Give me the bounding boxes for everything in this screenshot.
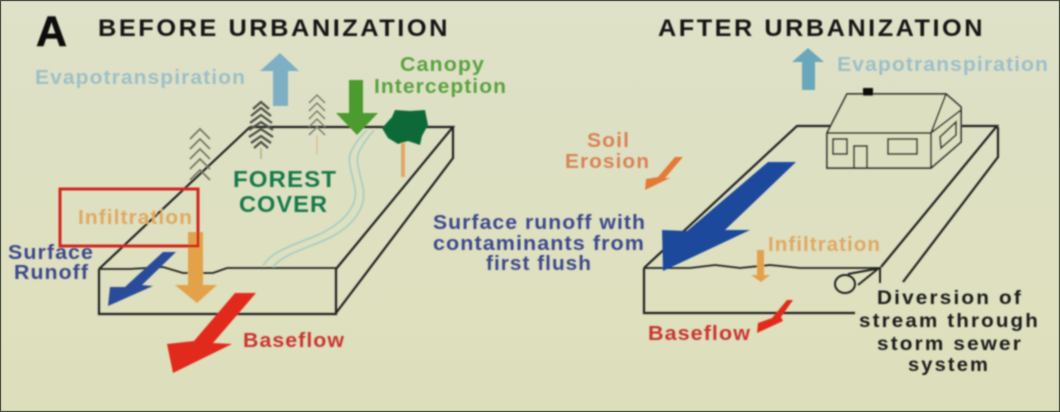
block of land: forest [99,127,453,314]
label: infiltration: Infiltration [768,234,881,256]
label: diversion of stream through storm sewer system [859,288,1040,376]
label: forest: FOREST [233,166,337,192]
label: diversion of stream through storm sewer system: stream through [859,311,1040,332]
heading: after urbanization: AFTER URBANIZATION [658,15,985,42]
arrow: baseflow [167,293,256,373]
arrow: infiltration [175,232,217,303]
icon: round broadleaf tree [382,110,428,177]
label: erosion: Erosion [565,151,650,173]
panel letter A: A [36,8,68,56]
label: cover: COVER [239,191,328,217]
arrow: canopy interception [336,80,378,135]
label: runoff: Runoff [14,262,89,284]
label: infiltration: Infiltration [78,207,193,229]
arrow: surface runoff with contaminants [662,162,796,271]
label: canopy: Canopy [400,54,485,76]
label: evapotranspiration: Evapotranspiration [35,67,246,89]
panel: after urbanization [433,15,1049,376]
label: interception: Interception [374,76,507,98]
label: diversion of stream through storm sewer system: storm sewer [877,334,1023,355]
arrow: surface runoff [108,252,176,306]
label: surface: Surface [8,242,94,264]
label: diversion of stream through storm sewer system: Diversion of [877,288,1023,309]
label: contaminants from: contaminants from [433,233,645,255]
block of land: urban [644,126,998,313]
label: diversion of stream through storm sewer system: system [908,355,990,376]
label: evapotranspiration: Evapotranspiration [837,54,1049,76]
highlight box [60,189,198,246]
arrow: soil erosion [645,157,683,190]
icon: house [827,88,961,168]
label: soil: Soil [587,130,630,152]
label: first flush: first flush [486,253,592,275]
label: baseflow: Baseflow [648,323,751,345]
icon: conifer tree right [309,95,325,155]
icon: storm sewer pipe [835,268,881,293]
panel: before urbanization [8,8,507,373]
arrow: evapotranspiration [792,48,824,90]
label: baseflow: Baseflow [243,330,345,352]
arrow: evapotranspiration [260,53,299,106]
label: surface runoff with: Surface runoff with [433,212,646,234]
heading: before urbanization: BEFORE URBANIZATION [98,15,450,42]
icon: dark conifer tree [249,102,273,159]
stream [263,130,374,267]
arrow: infiltration [751,250,770,282]
icon: conifer tree left [190,129,210,180]
arrow: baseflow [757,300,793,333]
